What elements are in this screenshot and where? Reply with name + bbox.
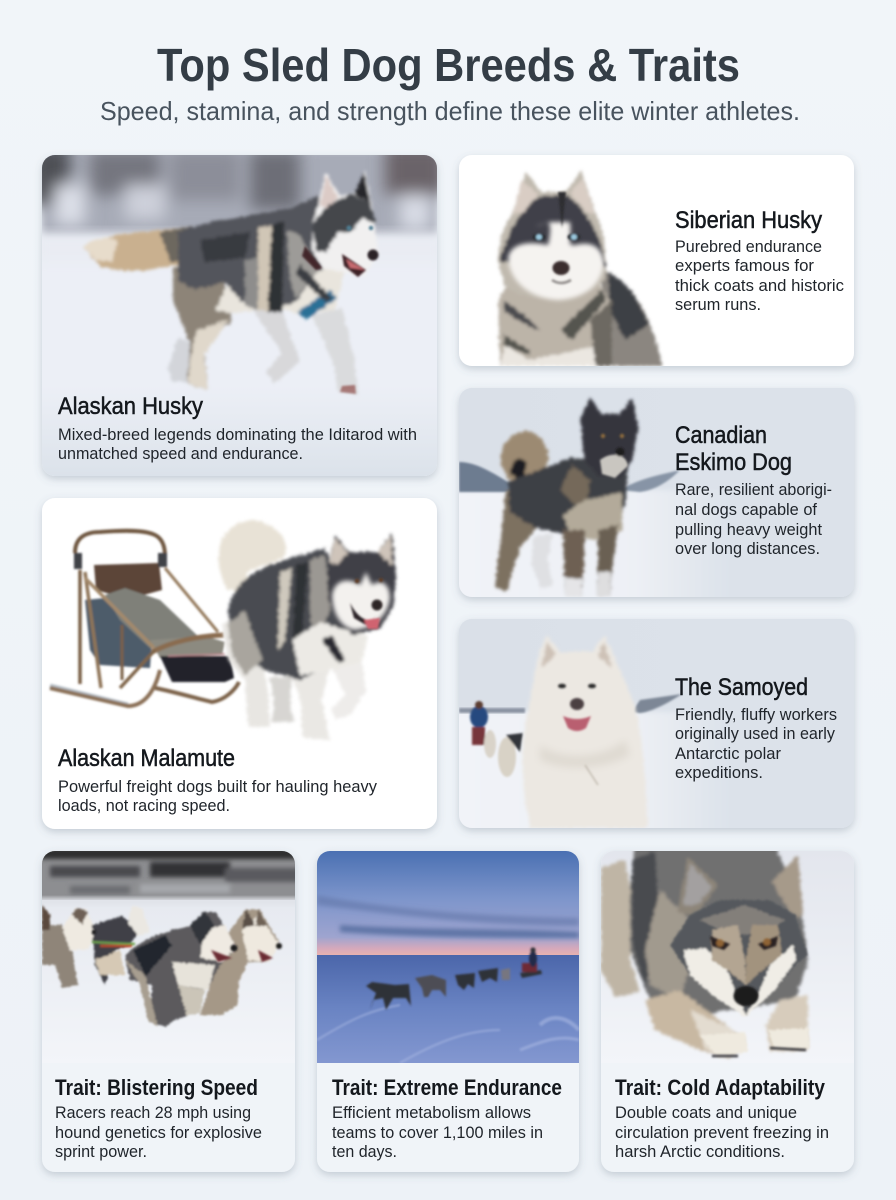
tail	[501, 431, 548, 484]
text: Blistering Speed description: Racers reach 28 mph using	[55, 1104, 251, 1122]
text: Siberian Husky description: serum runs.	[675, 296, 761, 314]
text: Alaskan Husky description: unmatched speed and endurance.	[58, 445, 303, 463]
text: Cold Adaptability description: Double coats and unique	[615, 1104, 797, 1122]
text: Canadian Eskimo Dog description: pulling heavy weight	[675, 521, 822, 539]
tail	[83, 228, 186, 271]
photo: husky trotting in snow	[42, 155, 437, 416]
photo: racing huskies	[42, 851, 295, 1028]
far hind leg	[167, 338, 190, 383]
front leg	[293, 670, 330, 740]
text: Alaskan Malamute description: Powerful freight dogs built for hauling heavy	[58, 778, 378, 796]
back	[630, 845, 808, 1015]
dog 3	[125, 912, 236, 1027]
body	[523, 635, 648, 828]
body	[228, 548, 350, 680]
text: Extreme Endurance description: Efficient metabolism allows	[332, 1104, 531, 1122]
text: Canadian Eskimo Dog description: over long distances.	[675, 540, 820, 558]
hind leg	[173, 262, 232, 390]
panel: Canadian Eskimo Dog	[456, 388, 858, 604]
text: Cold Adaptability description	[615, 1104, 829, 1161]
ears	[677, 857, 718, 915]
photo: frost-covered dog in snow	[601, 845, 854, 1063]
head	[327, 533, 396, 635]
text: Alaskan Malamute description	[58, 778, 378, 815]
head	[581, 398, 638, 478]
heading: Alaskan Malamute: Alaskan Malamute	[58, 745, 235, 772]
back dog 2	[92, 916, 140, 985]
text: Blistering Speed description: hound genetics for explosive	[55, 1124, 262, 1142]
head	[312, 170, 378, 276]
photo: sled team on frozen plain at dusk	[317, 851, 579, 1063]
text: Siberian Husky description: thick coats and historic	[675, 277, 844, 295]
dog 4	[200, 909, 280, 1015]
text: Canadian Eskimo Dog description: nal dogs capable of	[675, 501, 817, 519]
back	[178, 196, 340, 312]
text: The Samoyed description: Antarctic polar	[675, 745, 782, 763]
panel: Alaskan Husky	[30, 145, 450, 476]
text: Siberian Husky description: experts famous for	[675, 257, 815, 275]
icon: wooden dog sled	[50, 531, 239, 706]
panel: Trait Cold Adaptability	[601, 845, 854, 1172]
panel: Trait Blistering Speed	[35, 848, 305, 1172]
belly and chest	[215, 262, 345, 315]
text: Siberian Husky description	[675, 238, 844, 314]
heading: Trait Blistering Speed: Trait: Blistering Speed	[55, 1075, 258, 1100]
text: The Samoyed description: originally used in early	[675, 725, 836, 743]
photo: Siberian husky portrait	[498, 170, 662, 366]
head	[498, 170, 606, 298]
text: Canadian Eskimo Dog description	[675, 481, 832, 558]
text: Extreme Endurance description: ten days.	[332, 1143, 397, 1161]
heading: Canadian Eskimo Dog	[675, 422, 792, 476]
text: Cold Adaptability description: circulation prevent freezing in	[615, 1124, 829, 1142]
text: Extreme Endurance description: teams to cover 1,100 miles in	[332, 1124, 543, 1142]
photo: Malamute beside a sled	[50, 520, 396, 740]
panel: Trait Extreme Endurance	[317, 851, 579, 1172]
text: Blistering Speed description: sprint power.	[55, 1143, 147, 1161]
text: Cold Adaptability description: harsh Arctic conditions.	[615, 1143, 785, 1161]
heading: Alaskan Husky: Alaskan Husky	[58, 393, 203, 420]
icon: Alaskan Malamute dog	[219, 520, 396, 740]
heading: Canadian Eskimo Dog: Eskimo Dog	[675, 449, 792, 476]
text: Blistering Speed description	[55, 1104, 262, 1161]
tail	[219, 520, 286, 590]
panel: Alaskan Malamute	[42, 498, 437, 829]
far legs	[269, 677, 294, 722]
title: Top Sled Dog Breeds & Traits	[157, 39, 740, 91]
heading: The Samoyed: The Samoyed	[675, 674, 808, 701]
back dog 1	[42, 925, 78, 988]
text: The Samoyed description: expeditions.	[675, 764, 763, 782]
body	[508, 458, 628, 534]
subtitle: Speed, stamina, and strength define these elite winter athletes.	[100, 96, 800, 126]
hind leg	[222, 612, 270, 727]
photo: Canadian Eskimo dog on ice	[459, 396, 684, 597]
heading: Siberian Husky: Siberian Husky	[675, 207, 822, 234]
far leg	[532, 534, 553, 588]
face	[670, 900, 808, 1016]
text: The Samoyed description	[675, 706, 837, 782]
icon: sled team silhouettes	[366, 947, 542, 1010]
text: Alaskan Husky description: Mixed-breed legends dominating the Iditarod with	[58, 426, 417, 444]
heading: Trait Cold Adaptability: Trait: Cold Adaptability	[615, 1075, 826, 1100]
text: Siberian Husky description: Purebred endurance	[675, 238, 822, 256]
body	[590, 270, 662, 366]
rear haunch	[601, 860, 640, 997]
photo: Samoyed with sled team	[459, 638, 684, 828]
forelegs	[645, 990, 745, 1058]
text: The Samoyed description: Friendly, fluffy workers	[675, 706, 837, 724]
text: Canadian Eskimo Dog description: Rare, resilient aborigi-	[675, 481, 832, 499]
hind leg	[495, 490, 540, 592]
harness	[297, 290, 337, 320]
panel: Siberian Husky	[459, 155, 854, 366]
text: Alaskan Malamute description: loads, not racing speed.	[58, 797, 230, 815]
heading: Canadian Eskimo Dog: Canadian	[675, 422, 767, 449]
text: Alaskan Husky description	[58, 426, 417, 463]
text: Extreme Endurance description	[332, 1104, 543, 1161]
front legs	[563, 530, 585, 597]
heading: Trait Extreme Endurance: Trait: Extreme Endurance	[332, 1075, 562, 1100]
front legs	[253, 310, 300, 384]
panel: The Samoyed	[456, 618, 858, 834]
